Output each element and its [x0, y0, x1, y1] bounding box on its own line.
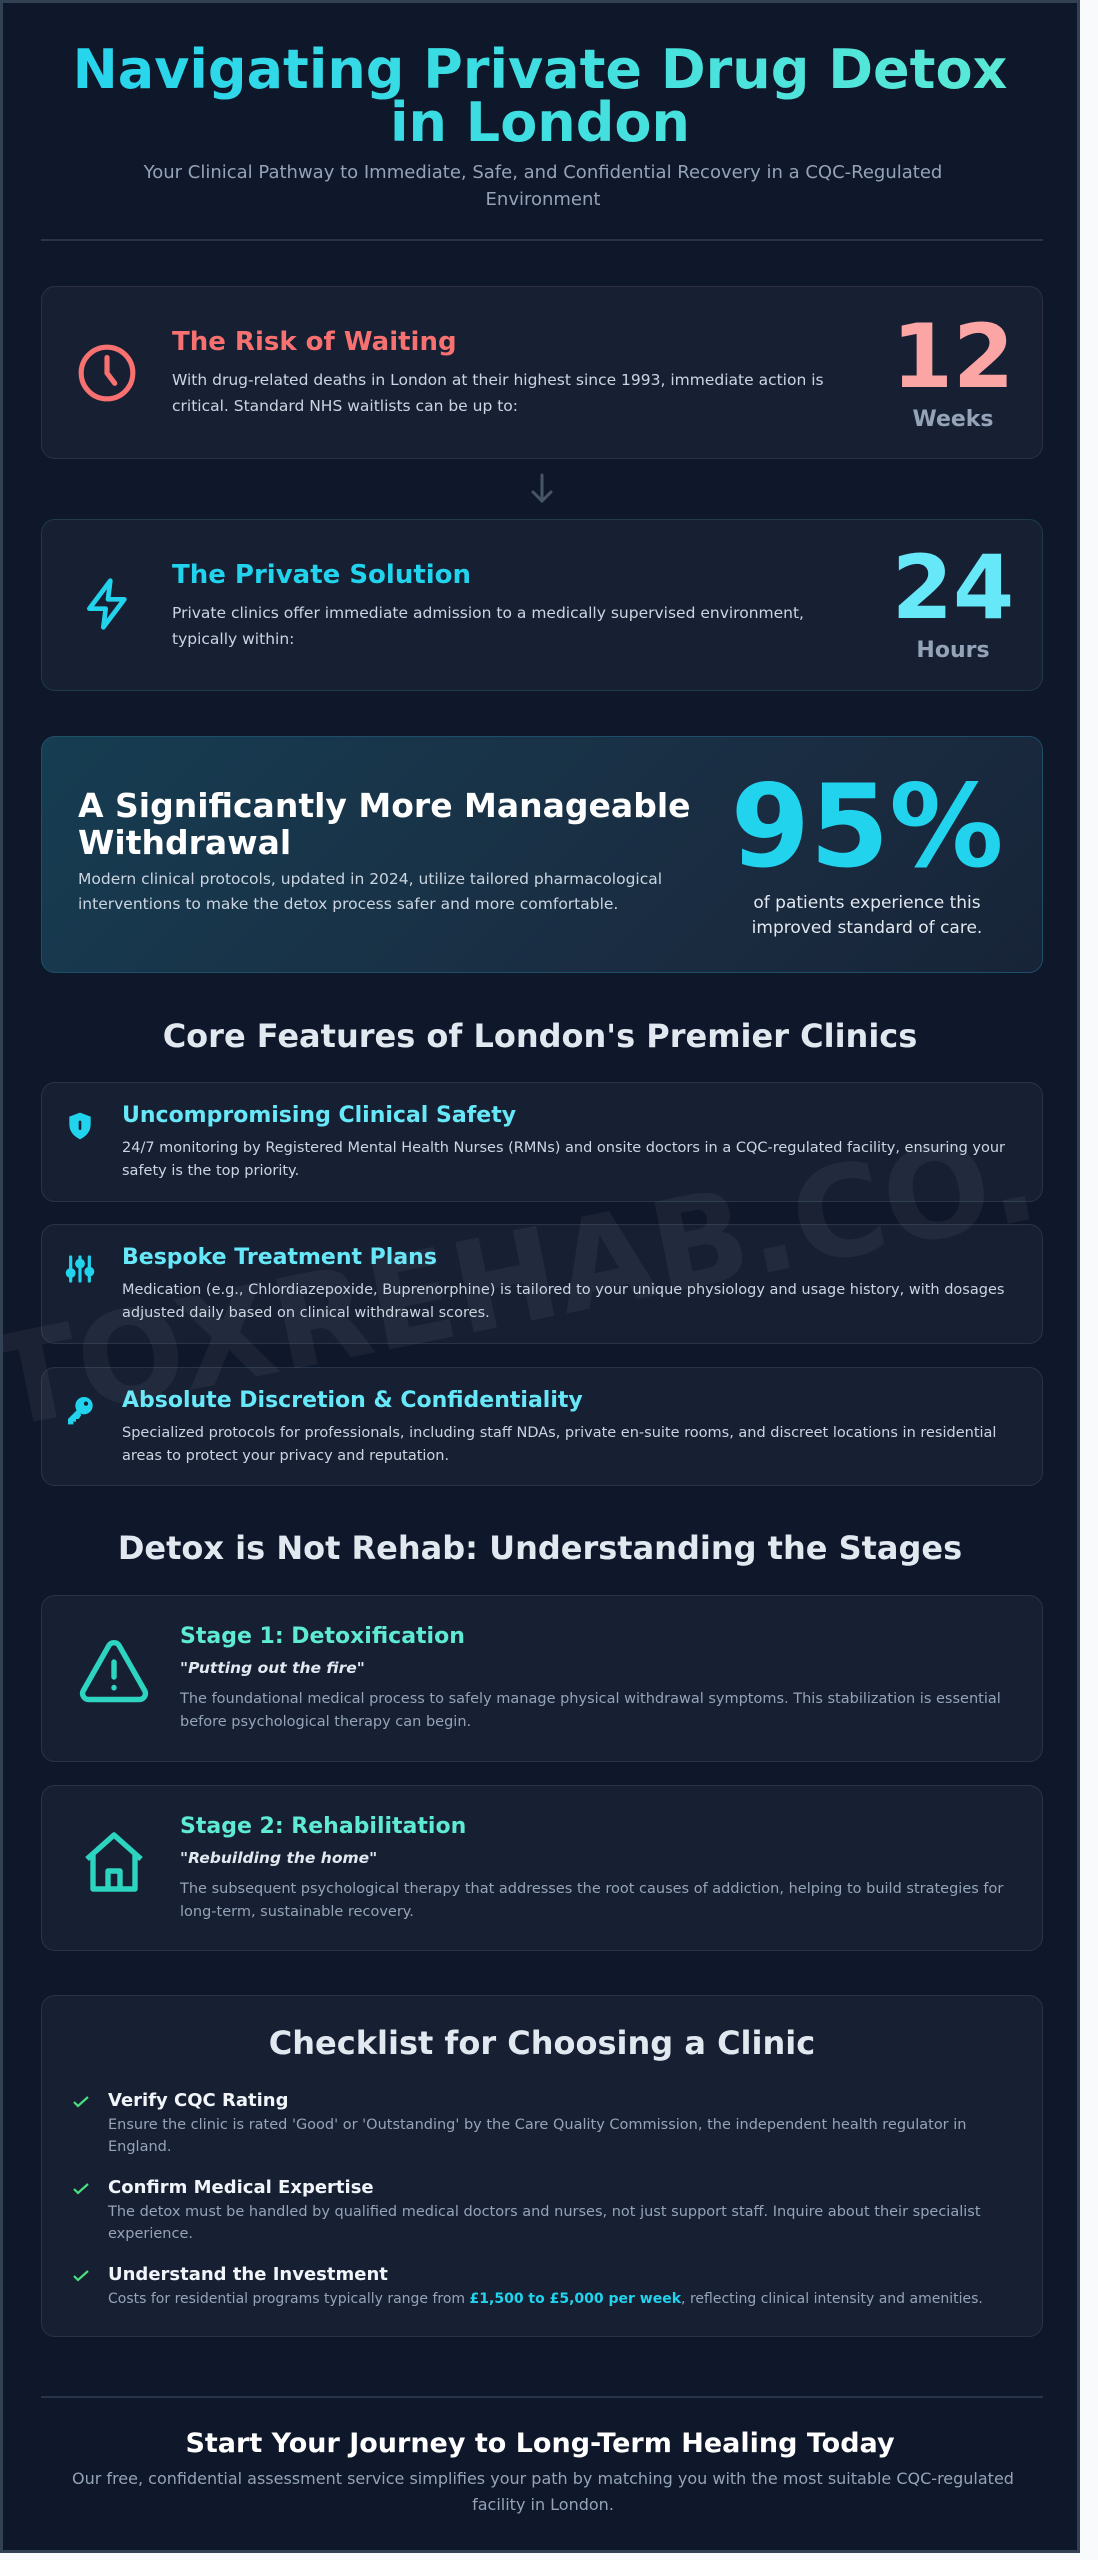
stage 1 [41, 1595, 1043, 1762]
footer heading: Start Your Journey to Long-Term Healing Today [185, 2428, 895, 2459]
stat: 12 weeks: Weeks [912, 407, 994, 432]
feature: safety: Uncompromising Clinical Safety [122, 1103, 516, 1128]
text: Private clinics offer immediate admission to a medically supervised environment, typically within: [172, 604, 804, 648]
stage 2: Stage 2: Rehabilitation [180, 1814, 466, 1839]
item 3 [73, 2264, 983, 2307]
icon: lightning [87, 578, 127, 630]
item 2 [73, 2177, 981, 2242]
feature: discretion [41, 1367, 1043, 1486]
heading: Checklist for Choosing a Clinic [269, 2024, 815, 2062]
panel: checklist: Verify CQC Rating [108, 2090, 289, 2111]
icon: shield [69, 1112, 91, 1140]
panel: checklist: Costs for residential programs typically range from £1,500 to £5,000 per week, reflecting clinical intensity and amenities. [108, 2291, 983, 2307]
feature: bespoke: Bespoke Treatment Plans [122, 1245, 437, 1270]
panel: checklist: The detox must be handled by qualified medical doctors and nurses, not just support staff. Inquire about their specialist experience. [108, 2204, 981, 2242]
feature: safety: 24/7 monitoring by Registered Mental Health Nurses (RMNs) and onsite doctors in a CQC-regulated facility, ensuring your safety is the top priority. [122, 1140, 1005, 1179]
stage 1: "Putting out the fire" [180, 1659, 365, 1677]
heading: A Significantly More Manageable Withdrawal [78, 786, 691, 862]
heading: The Risk of Waiting [172, 327, 457, 357]
feature: bespoke [41, 1224, 1043, 1344]
watermark: TOXREHAB.CO. [3, 1102, 1048, 1457]
panel: private solution [41, 519, 1043, 691]
stat: 95%: improved standard of care. [752, 918, 982, 938]
panel: manageable withdrawal [41, 736, 1043, 973]
feature: discretion: Absolute Discretion & Confidentiality [122, 1388, 583, 1413]
stat: 95%: of patients experience this [753, 893, 981, 913]
text: Modern clinical protocols, updated in 2024, utilize tailored pharmacological interventions to make the detox process safer and more comfortable. [78, 870, 662, 913]
heading: core features: Core Features of London's Premier Clinics [163, 1017, 917, 1055]
feature: safety [41, 1082, 1043, 1202]
stage 2 [41, 1785, 1043, 1951]
footer text: Our free, confidential assessment service simplifies your path by matching you with the most suitable CQC-regulated facility in London. [72, 2469, 1014, 2514]
heading: The Private Solution [172, 560, 471, 590]
stage 1: Stage 1: Detoxification [180, 1624, 465, 1649]
heading: stages: Detox is Not Rehab: Understanding the Stages [118, 1529, 962, 1567]
panel: risk of waiting [41, 286, 1043, 459]
stage 2: The subsequent psychological therapy that addresses the root causes of addiction, helping to build strategies for long-term, sustainable recovery. [180, 1881, 1003, 1920]
stat: 24 hours: Hours [916, 638, 990, 663]
panel: checklist: Ensure the clinic is rated 'Good' or 'Outstanding' by the Care Quality Commission, the independent health regulator in England. [108, 2117, 966, 2155]
icon: sliders [66, 1255, 94, 1283]
icon: warning [80, 1640, 148, 1702]
icon: clock [78, 344, 136, 402]
title: Navigating Private Drug Detox [73, 38, 1007, 101]
title [3, 43, 1077, 149]
feature: bespoke: Medication (e.g., Chlordiazepoxide, Buprenorphine) is tailored to your unique physiology and usage history, with dosages adjusted daily based on clinical withdrawal scores. [122, 1282, 1004, 1321]
stage 1: The foundational medical process to safely manage physical withdrawal symptoms. This stabilization is essential before psychological therapy can begin. [180, 1691, 1001, 1730]
stat: 95%: 95% [731, 760, 1003, 893]
title: in London [390, 91, 690, 154]
panel: checklist [41, 1995, 1043, 2337]
stat: 24 hours: 24 [892, 536, 1014, 639]
feature: discretion: Specialized protocols for professionals, including staff NDAs, private en-suite rooms, and discreet locations in residential areas to protect your privacy and reputation. [122, 1425, 996, 1464]
arrow [532, 474, 552, 503]
panel: checklist: Confirm Medical Expertise [108, 2177, 374, 2198]
stage 2: "Rebuilding the home" [180, 1849, 377, 1867]
subtitle: Your Clinical Pathway to Immediate, Safe, and Confidential Recovery in a CQC-Regulated Environment [144, 162, 942, 210]
item 1 [73, 2090, 966, 2155]
text: With drug-related deaths in London at their highest since 1993, immediate action is critical. Standard NHS waitlists can be up to: [172, 371, 824, 415]
panel: checklist: Understand the Investment [108, 2264, 388, 2285]
icon: house [85, 1832, 143, 1892]
icon: key [68, 1397, 93, 1424]
stat: 12 weeks: 12 [892, 305, 1014, 408]
